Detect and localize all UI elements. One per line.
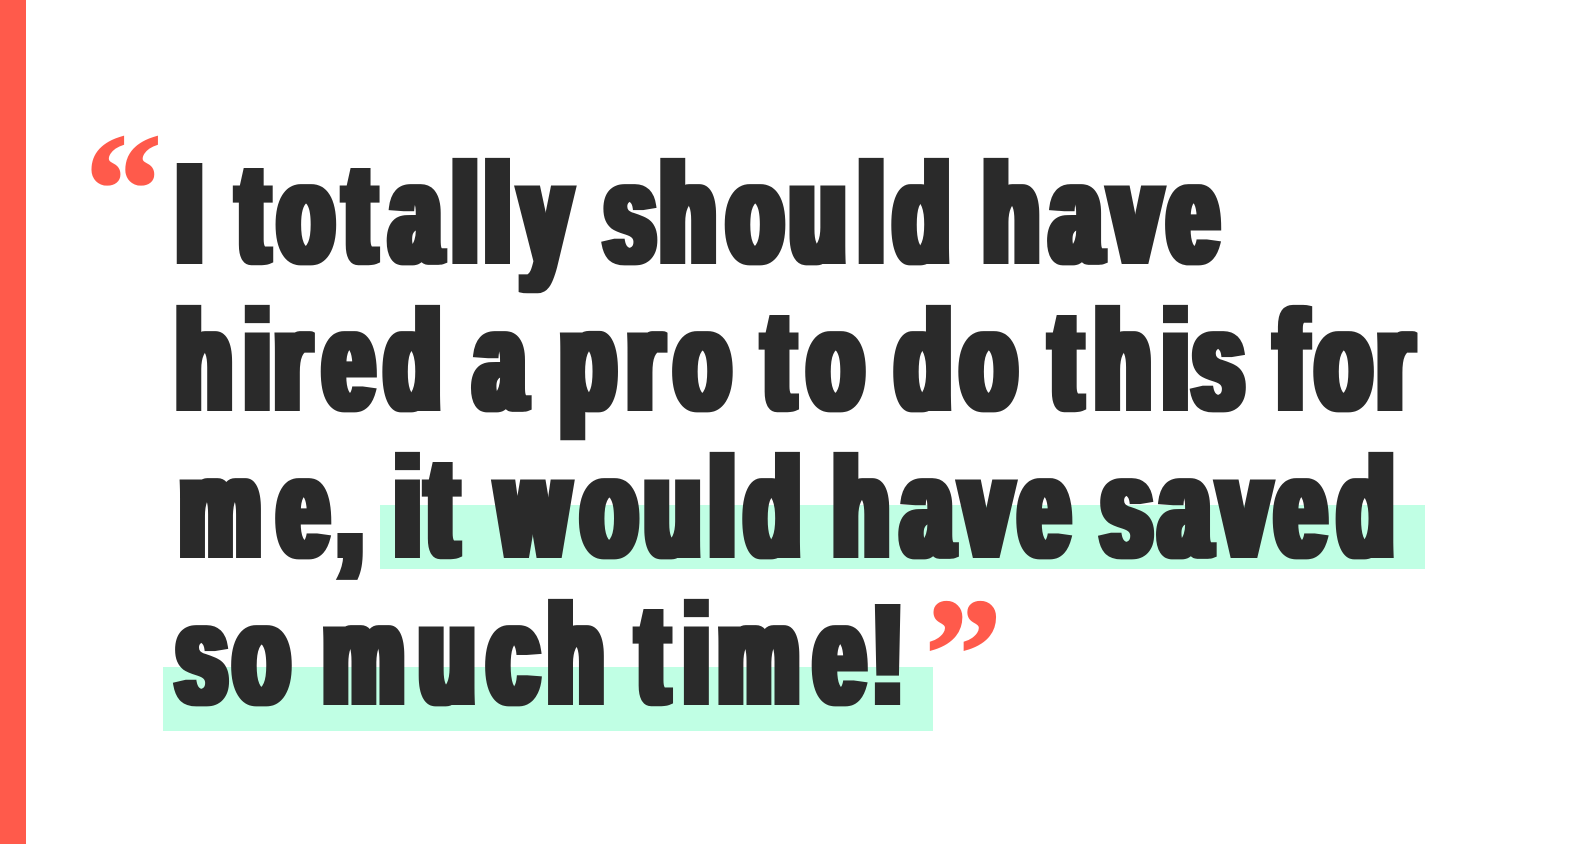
line 1: totally bbox=[238, 136, 571, 293]
line 3: saved bbox=[1101, 430, 1393, 587]
line 1: should bbox=[605, 136, 949, 293]
line 2: a bbox=[475, 283, 526, 440]
line 3: have bbox=[833, 430, 1069, 587]
highlight: line four bbox=[163, 667, 933, 731]
line 3: me, bbox=[180, 430, 363, 587]
line 3 bbox=[180, 430, 1393, 587]
line 2: this bbox=[1051, 283, 1243, 440]
line 1: I bbox=[177, 136, 202, 293]
line 3: would bbox=[497, 430, 800, 587]
line 3: it bbox=[395, 430, 457, 587]
closing quotation mark: ” bbox=[925, 567, 1002, 742]
highlight: line three bbox=[380, 505, 1425, 569]
line 2: do bbox=[896, 283, 1016, 440]
line 2: for bbox=[1276, 283, 1413, 440]
red side bar bbox=[0, 0, 26, 844]
line 4 bbox=[176, 577, 903, 734]
line 4: much bbox=[323, 577, 603, 734]
line 2: pro bbox=[560, 283, 730, 440]
line 4: so bbox=[176, 577, 289, 734]
quote text bbox=[176, 136, 1413, 734]
line 2: hired bbox=[176, 283, 440, 440]
opening quotation mark: “ bbox=[85, 102, 162, 277]
line 2 bbox=[176, 283, 1413, 440]
line 4: time! bbox=[638, 577, 903, 734]
line 1 bbox=[177, 136, 1218, 293]
line 1: have bbox=[984, 136, 1218, 293]
line 2: to bbox=[764, 283, 863, 440]
